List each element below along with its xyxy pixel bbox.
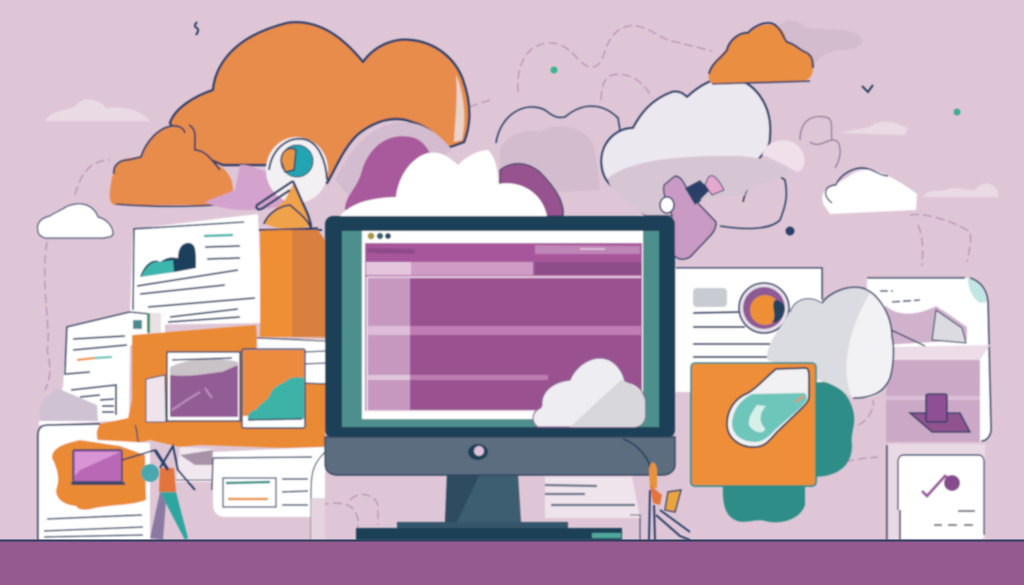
window content bbox=[365, 243, 642, 411]
bottom document bbox=[38, 424, 150, 540]
big lavender cloud bbox=[601, 78, 770, 215]
window dots bbox=[368, 233, 374, 239]
image card bbox=[167, 352, 240, 421]
far right panel bbox=[867, 278, 991, 540]
big orange cloud bbox=[170, 22, 469, 183]
circle icon bbox=[739, 283, 789, 333]
cloud highlight bbox=[454, 75, 464, 142]
purple back clouds bbox=[345, 136, 440, 210]
orange column bbox=[260, 230, 292, 337]
text document bbox=[38, 312, 165, 425]
orange cloud top right bbox=[709, 25, 813, 84]
lines under monitor bbox=[545, 477, 640, 540]
desk icon bbox=[910, 394, 970, 432]
small white cloud right bbox=[822, 170, 917, 214]
white cloud above monitor bbox=[340, 150, 547, 216]
dots and marks bbox=[550, 66, 558, 74]
white window bbox=[362, 231, 643, 419]
floor bbox=[0, 540, 1024, 585]
dashed connector lines bbox=[45, 26, 971, 528]
chin bbox=[325, 437, 675, 475]
flask bbox=[727, 368, 809, 447]
orange card with teal cloud bbox=[242, 349, 305, 428]
compass figure bbox=[264, 184, 312, 229]
teal screen bbox=[342, 231, 659, 427]
bottom card bbox=[887, 444, 985, 540]
chart document bbox=[130, 214, 262, 325]
person right bbox=[649, 462, 690, 540]
orange card flask bbox=[691, 363, 816, 486]
left document stack bbox=[38, 214, 325, 540]
person left bbox=[141, 446, 195, 540]
outlined back clouds bbox=[496, 106, 786, 228]
screen cloud bbox=[533, 358, 645, 427]
monitor bbox=[325, 216, 675, 540]
faint background clouds bbox=[44, 99, 999, 197]
white side panel bbox=[146, 375, 166, 422]
grey white cloud right bbox=[767, 287, 893, 398]
laptop bbox=[71, 450, 125, 485]
stand bbox=[445, 474, 521, 522]
orange mass bbox=[95, 325, 325, 448]
pale arc behind bbox=[335, 122, 452, 210]
grey shadow clouds bbox=[500, 20, 862, 195]
right document bbox=[676, 268, 822, 392]
spray bottle bbox=[660, 176, 724, 259]
grey cloud bbox=[39, 389, 98, 421]
stripes beside card bbox=[257, 339, 325, 383]
pale wedge and right panel bbox=[176, 447, 213, 482]
small orange cloud bbox=[110, 126, 233, 205]
teal blob bbox=[723, 382, 854, 522]
pin bubble bbox=[266, 137, 328, 203]
bezel bbox=[325, 216, 675, 438]
small white cloud left bbox=[38, 204, 113, 238]
globe pin bbox=[256, 137, 328, 230]
monitor base bbox=[397, 522, 568, 528]
